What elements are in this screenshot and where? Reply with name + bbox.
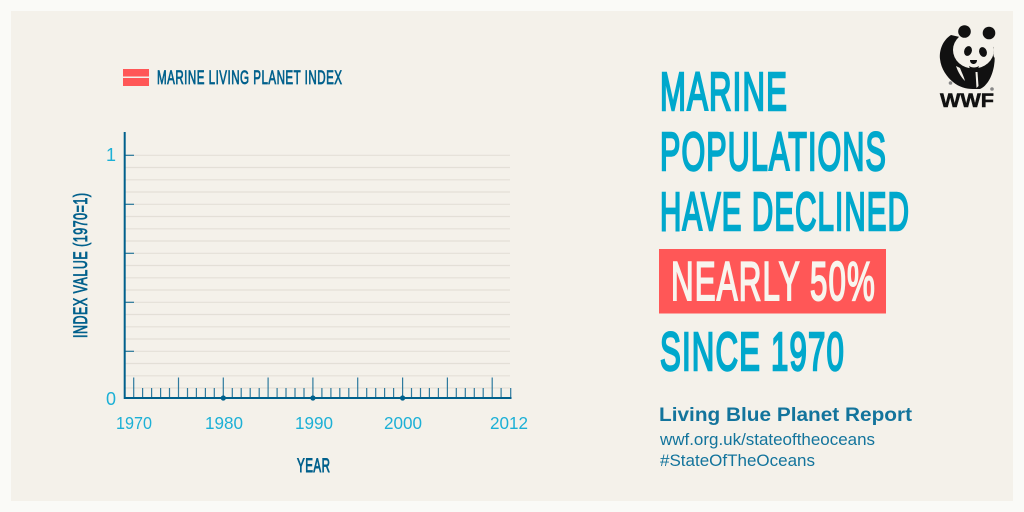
headline end: since 1970: SINCE 1970	[660, 323, 845, 382]
y axis tick labels: 0	[106, 389, 116, 409]
y axis tick labels: 1	[106, 145, 116, 165]
line chart axes with empty plot area	[124, 132, 512, 401]
headline: MARINE	[660, 63, 788, 122]
report credits: #StateOfTheOceans	[660, 451, 815, 470]
x axis year labels: 1990	[295, 413, 333, 433]
legend: marine living planet index	[123, 68, 342, 89]
y axis tick labels	[106, 145, 116, 409]
report credits: wwf.org.uk/stateoftheoceans	[659, 430, 875, 449]
y axis title: INDEX VALUE (1970=1)	[71, 192, 92, 338]
highlighted stat: nearly 50%: NEARLY 50%	[671, 250, 876, 312]
x axis year labels: 1980	[205, 413, 243, 433]
x axis title: YEAR	[297, 456, 330, 477]
report credits: Living Blue Planet Report	[659, 405, 913, 426]
highlighted stat: nearly 50%	[659, 249, 886, 314]
report credits	[659, 405, 913, 470]
x axis year labels: 1970	[116, 413, 152, 433]
icon: WWF panda logo	[940, 25, 997, 112]
legend: marine living planet index: MARINE LIVING PLANET INDEX	[157, 68, 342, 89]
headline	[660, 63, 910, 242]
x axis year labels: 2012	[490, 413, 528, 433]
x axis year labels: 2000	[384, 413, 422, 433]
icon: WWF panda logo: WWF	[940, 91, 994, 112]
x axis year labels	[116, 413, 528, 433]
